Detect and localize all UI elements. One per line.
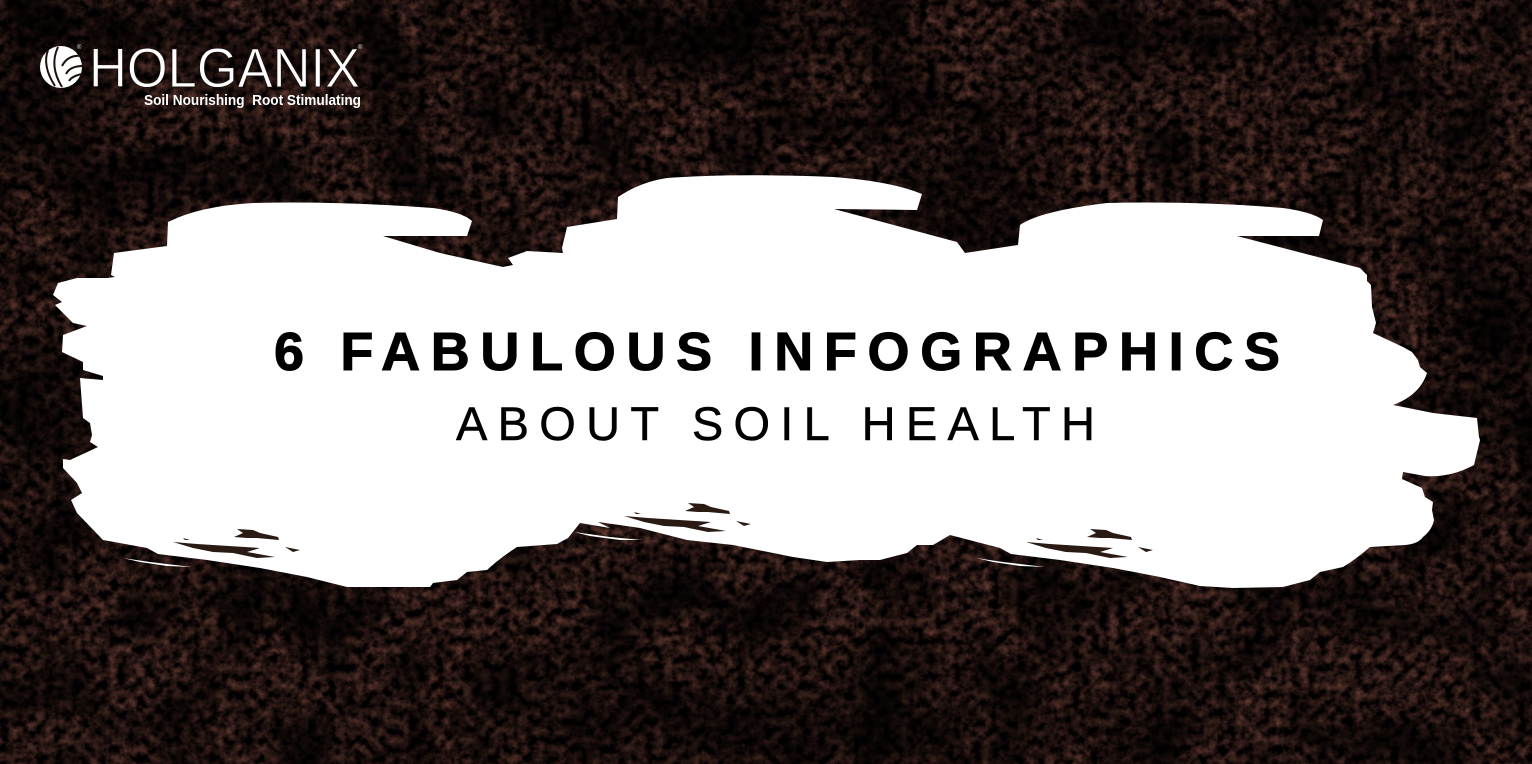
logo: Holganix <box>40 36 363 109</box>
title: 6 FABULOUS INFOGRAPHICS <box>274 322 1280 382</box>
white flecks below the brush <box>123 532 1045 567</box>
brush specks: right <box>1026 529 1153 558</box>
icon: leaf globe <box>40 46 83 88</box>
logo tagline: Soil Nourishing Root Stimulating <box>144 93 361 109</box>
white brush stroke panel <box>53 175 1480 588</box>
subtitle: ABOUT SOIL HEALTH <box>456 397 1095 450</box>
registered mark: icon: ® <box>77 44 82 51</box>
logo wordmark: HOLGANIX <box>89 36 360 99</box>
registered mark: wordmark: ® <box>358 44 363 51</box>
brush specks: left <box>173 529 300 558</box>
brush specks: centre <box>624 503 751 532</box>
